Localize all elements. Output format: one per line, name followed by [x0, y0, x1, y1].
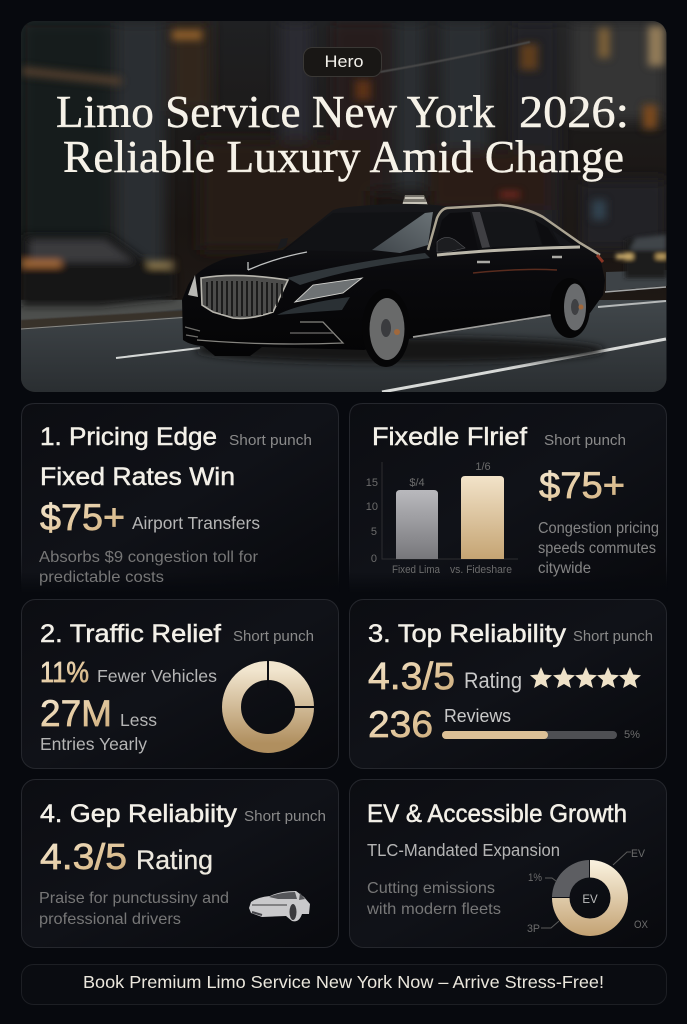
description: with modern fleets — [366, 901, 501, 918]
headlight — [295, 278, 362, 302]
stat: 11%: 11% — [40, 657, 89, 689]
description — [538, 520, 659, 577]
stat: 4.3/5: 4.3/5 — [368, 656, 455, 698]
description — [366, 880, 501, 918]
bar chart: vs. Fideshare — [450, 564, 512, 576]
donut chart: OX — [634, 919, 649, 931]
windshield — [285, 212, 425, 252]
short punch label: Short punch — [229, 433, 312, 449]
donut chart: 3P — [527, 923, 540, 935]
description — [39, 549, 259, 586]
side windows — [442, 212, 472, 222]
heading: 2. Traffic Relief — [40, 620, 221, 648]
bar chart — [366, 461, 518, 576]
hero tag pill — [304, 48, 382, 76]
limousine — [182, 195, 605, 367]
heading: 3. Top Reliability — [368, 620, 567, 648]
hood highlights — [248, 252, 307, 270]
description: Praise for punctussiny and — [39, 890, 229, 907]
description — [39, 890, 229, 928]
bar chart: 0 — [371, 553, 377, 565]
bar chart: Fixed Lima — [392, 564, 441, 576]
road — [21, 300, 667, 392]
grille — [201, 275, 288, 318]
stat: 236: 236 — [368, 704, 433, 745]
subheading: Fixed Rates Win — [40, 463, 235, 491]
title — [56, 86, 629, 182]
stat label — [40, 710, 157, 754]
stat label: Fewer Vehicles — [97, 666, 217, 686]
short punch label: Short punch — [233, 629, 314, 645]
hero photo: blurred city street — [21, 21, 667, 392]
stat label: Less — [120, 710, 157, 730]
door handles and side details — [477, 257, 562, 262]
donut chart — [527, 848, 649, 936]
stat label: Entries Yearly — [40, 734, 147, 754]
call to action bar — [22, 964, 666, 1004]
panel: top reliability — [350, 600, 666, 768]
donut chart: EV — [631, 848, 646, 860]
taxi roof sign — [402, 195, 428, 205]
front bumper — [197, 322, 343, 344]
icon: car — [249, 891, 310, 921]
donut chart: 1% — [528, 872, 542, 884]
panel: fixed vs rideshare chart — [348, 404, 668, 593]
side mirror — [437, 237, 465, 252]
five stars — [530, 667, 641, 688]
call to action bar: Book Premium Limo Service New York Now – Arrive Stress-Free! — [83, 972, 604, 992]
bar chart: 10 — [366, 501, 378, 513]
description: citywide — [538, 560, 591, 577]
title: Reliable Luxury Amid Change — [63, 131, 624, 182]
stat: $75+: $75+ — [539, 465, 625, 506]
bar chart: 15 — [366, 477, 378, 489]
front wheel — [366, 298, 409, 367]
chrome roofline — [428, 205, 600, 255]
stat: 4.3/5: 4.3/5 — [40, 836, 127, 877]
donut chart: EV — [582, 894, 598, 906]
stat label: Airport Transfers — [132, 513, 260, 533]
description: Absorbs $9 congestion toll for — [39, 549, 259, 566]
bar chart: $/4 — [409, 477, 425, 489]
description: predictable costs — [39, 569, 164, 586]
bar chart: 1/6 — [475, 461, 491, 473]
hero tag pill: Hero — [324, 52, 364, 71]
reviews label: Reviews — [444, 706, 511, 726]
stat label: Rating — [136, 845, 213, 875]
stat: 27M: 27M — [40, 693, 112, 734]
beltline chrome — [437, 247, 580, 255]
hero panel — [21, 21, 667, 392]
panel: pricing edge — [20, 404, 340, 593]
progress bar: 5% — [624, 729, 640, 741]
panel: EV and accessible growth — [350, 780, 666, 948]
subheading: TLC-Mandated Expansion — [367, 840, 560, 860]
stat: $75+: $75+ — [40, 497, 125, 538]
progress bar — [442, 729, 640, 741]
title: Limo Service New York — [56, 86, 495, 137]
blurred car right — [616, 233, 667, 278]
bar chart: 5 — [371, 526, 377, 538]
donut chart — [232, 660, 315, 744]
far mirror — [277, 238, 288, 250]
heading: 1. Pricing Edge — [40, 423, 217, 451]
description: professional drivers — [39, 911, 181, 928]
short punch label: Short punch — [573, 629, 653, 645]
description: Congestion pricing — [538, 520, 659, 537]
description: Cutting emissions — [367, 880, 495, 897]
heading: Fixedle Flrief — [372, 423, 527, 451]
car body — [182, 204, 605, 356]
title: 2026: — [519, 86, 629, 137]
heading: 4. Gep Reliabiity — [40, 800, 238, 828]
short punch label: Short punch — [244, 809, 326, 825]
panel: gep reliability — [22, 780, 338, 948]
description: speeds commutes — [538, 540, 656, 557]
stat label: Rating — [464, 668, 522, 693]
rear wheel — [550, 278, 590, 338]
heading: EV & Accessible Growth — [367, 800, 627, 828]
panel: traffic relief — [22, 600, 338, 768]
short punch label: Short punch — [544, 433, 626, 449]
blurred car left — [21, 235, 175, 306]
